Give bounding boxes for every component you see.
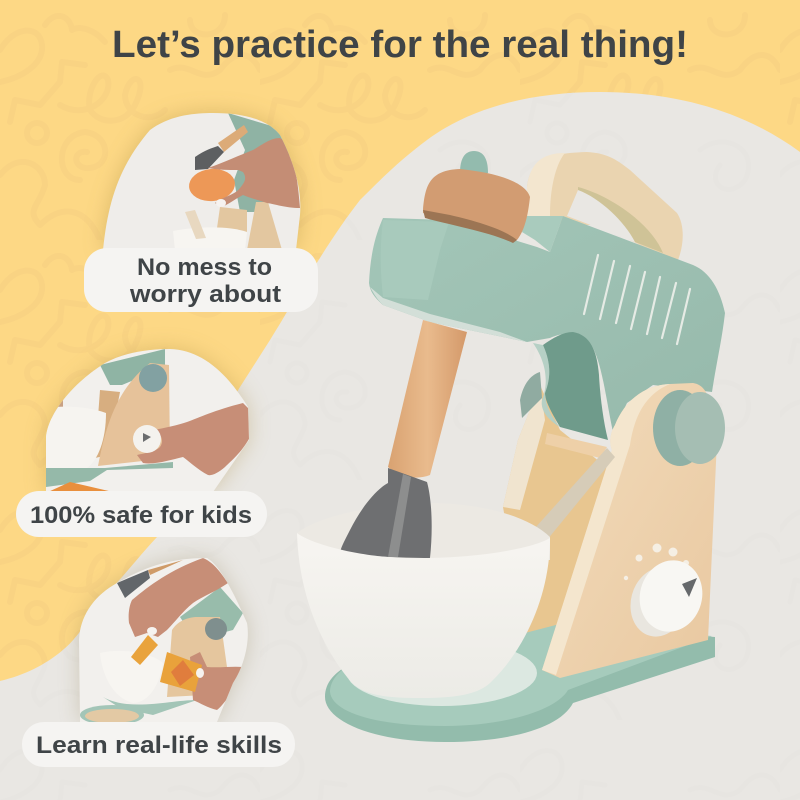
dial pointer bbox=[682, 578, 697, 597]
handle bbox=[527, 152, 683, 260]
head front face bbox=[381, 220, 449, 300]
handle plywood edge bbox=[527, 153, 565, 216]
wooden wheel bbox=[423, 169, 530, 240]
side knob face bbox=[675, 392, 725, 464]
head vents bbox=[584, 255, 690, 344]
mixer base top bbox=[330, 625, 712, 726]
head underside bbox=[370, 287, 527, 342]
dial face bbox=[632, 553, 710, 639]
arch light edge bbox=[533, 343, 560, 427]
dial dots bbox=[624, 544, 689, 580]
spatula rib bbox=[388, 474, 411, 557]
label: real-life skills bbox=[22, 722, 295, 767]
label: safe for kids: 100% safe for kids bbox=[30, 502, 252, 529]
white ring on base bbox=[347, 640, 537, 706]
label: no mess: No mess to bbox=[137, 254, 272, 281]
wheel underside bbox=[423, 210, 517, 243]
photo 3: pouring ingredients bbox=[75, 555, 255, 725]
bowl interior bbox=[297, 503, 550, 560]
bowl body bbox=[297, 533, 550, 698]
spatula blade bbox=[340, 468, 432, 558]
handle hole bbox=[567, 190, 635, 242]
label: no mess: worry about bbox=[129, 281, 281, 308]
side knob bbox=[653, 390, 707, 466]
label: real-life skills: Learn real-life skills bbox=[36, 732, 282, 759]
front upright bbox=[542, 383, 717, 678]
label: no mess bbox=[84, 248, 318, 312]
handle inner grain bbox=[578, 187, 663, 253]
spatula handle bbox=[388, 320, 467, 478]
photo 1: egg being cracked bbox=[100, 110, 305, 255]
knob on top bbox=[460, 151, 488, 178]
back upright bbox=[503, 385, 610, 633]
axle dowel bbox=[545, 433, 607, 458]
label: safe for kids bbox=[16, 491, 267, 537]
front upright plywood edge bbox=[542, 384, 670, 675]
back upright plywood edge bbox=[503, 385, 545, 510]
title: Let’s practice for the real thing! bbox=[112, 24, 688, 66]
dial bbox=[623, 561, 695, 643]
arch interior bbox=[543, 332, 608, 440]
mixer head bbox=[369, 216, 725, 432]
mixer base plate bbox=[325, 625, 715, 742]
main product: toy mixer bbox=[297, 151, 725, 742]
photo 2: turning the dial bbox=[40, 345, 255, 495]
back small knob bbox=[520, 372, 542, 418]
head top notch bbox=[522, 216, 563, 252]
tool stick in bowl bbox=[517, 448, 615, 548]
